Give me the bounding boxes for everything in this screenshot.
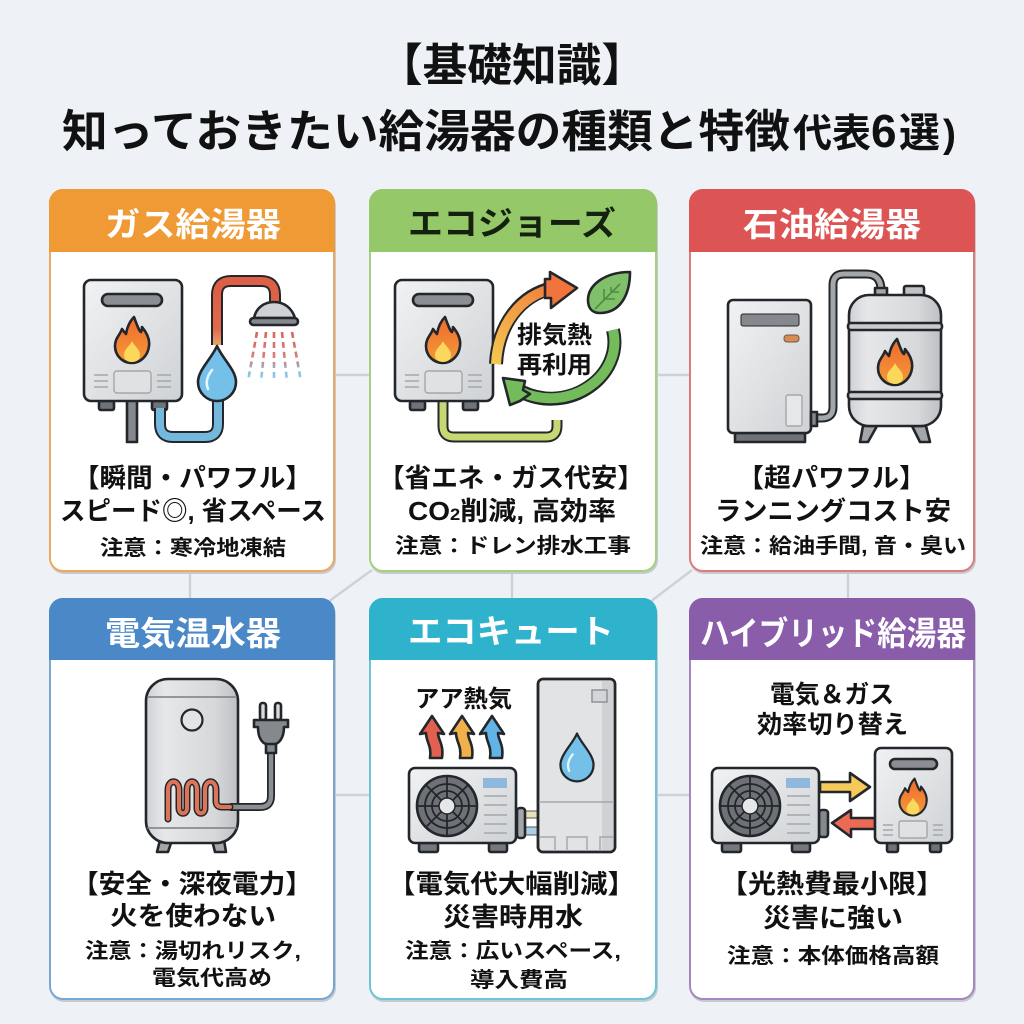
icon: heat pump and hot water tank: [409, 679, 615, 852]
text: EcoCute features: 導入費高: [470, 969, 568, 992]
heading: EcoCute: エコキュート: [408, 613, 614, 650]
text: EcoCute features: 注意：広いスペース,: [405, 940, 621, 963]
title: 6: [871, 105, 897, 157]
text: hybrid features: 災害に強い: [763, 903, 903, 933]
icon: heat pump and hot water tank: アア熱気: [415, 686, 512, 713]
title: 【基礎知識】: [378, 40, 646, 91]
text: oil features: 注意：給油手間, 音・臭い: [700, 535, 966, 558]
icon: condensing heater with recycle arrows: 排気熱: [517, 322, 592, 349]
heading: hybrid: ハイブリッド給湯器: [700, 615, 966, 652]
panel: gas water heater: [49, 189, 336, 574]
text: hybrid features: 【光熱費最小限】: [720, 869, 944, 899]
text: oil features: 【超パワフル】: [737, 463, 926, 493]
text: hybrid features: 注意：本体価格高額: [727, 945, 939, 968]
title: [62, 40, 956, 157]
panel: hybrid water heater: [689, 598, 976, 1002]
text: electric features: [72, 869, 312, 990]
text: electric features: 火を使わない: [110, 901, 276, 931]
text: EcoCute features: 災害時用水: [443, 902, 583, 932]
heading: hybrid: [689, 598, 975, 660]
text: switching note: 電気＆ガス: [770, 681, 894, 709]
text: oil features: [700, 463, 966, 558]
text: gas features: 注意：寒冷地凍結: [100, 537, 286, 560]
text: Eco-Jozu features: CO2削減, 高効率: [408, 496, 616, 526]
text: hybrid features: [720, 869, 944, 968]
heading: Eco-Jozu: エコジョーズ: [408, 205, 616, 242]
text: gas features: スピード◎, 省スペース: [60, 496, 326, 526]
heading: electric: 電気温水器: [105, 615, 281, 652]
text: switching note: 効率切り替え: [757, 711, 908, 739]
text: electric features: 注意：湯切れリスク,: [85, 940, 301, 963]
icon: heat pump and gas heater with arrows: [712, 748, 952, 852]
title: ): [943, 113, 956, 156]
text: EcoCute features: [388, 869, 635, 992]
title: 選: [899, 110, 940, 156]
heading: oil: [689, 189, 975, 252]
text: Eco-Jozu features: 【省エネ・ガス代安】: [378, 463, 644, 493]
title: 代表: [793, 113, 871, 156]
heading: gas: [49, 189, 335, 252]
text: switching note: [757, 681, 908, 739]
heading: Eco-Jozu: [369, 189, 657, 252]
text: EcoCute features: 【電気代大幅削減】: [388, 869, 635, 899]
heading: gas: ガス給湯器: [105, 206, 281, 243]
heading: electric: [49, 598, 335, 660]
icon: condensing heater with recycle arrows: 再利用: [517, 352, 592, 379]
text: Eco-Jozu features: [378, 463, 644, 558]
text: electric features: 電気代高め: [152, 967, 272, 990]
icon: oil heater with tank: [728, 274, 942, 442]
title: 知っておきたい給湯器の種類と特徴: [62, 106, 790, 157]
icon: gas heater with shower: [84, 280, 301, 442]
text: Eco-Jozu features: 注意：ドレン排水工事: [395, 534, 631, 558]
icon: condensing heater with recycle arrows: [395, 272, 630, 437]
icon: electric tank with plug: [146, 679, 288, 852]
panel: oil water heater: [689, 189, 976, 574]
text: gas features: [60, 463, 326, 560]
text: gas features: 【瞬間・パワフル】: [73, 463, 312, 493]
heading: oil: 石油給湯器: [743, 206, 921, 243]
panel: EcoCute: [369, 598, 658, 1002]
text: oil features: ランニングコスト安: [715, 496, 951, 526]
heading: EcoCute: [369, 598, 657, 660]
text: electric features: 【安全・深夜電力】: [72, 869, 312, 899]
panel: Eco-Jozu: [369, 189, 658, 574]
panel: electric water heater: [49, 598, 336, 1002]
